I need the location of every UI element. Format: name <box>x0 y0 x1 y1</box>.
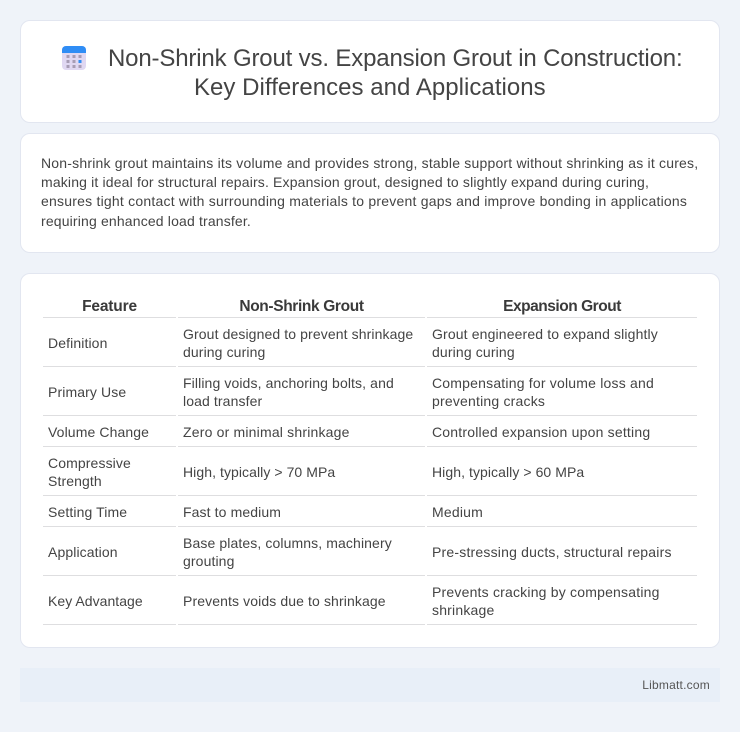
row: Definition <box>48 326 658 360</box>
row: Setting Time: Setting Time <box>48 504 127 520</box>
row: Application: grouting <box>183 553 234 569</box>
footer bar <box>20 668 720 702</box>
row: Volume Change <box>48 424 650 440</box>
row: Definition: Grout engineered to expand slightly <box>432 326 658 342</box>
footer text: Libmatt.com <box>642 678 710 692</box>
panel: title <box>20 20 720 123</box>
row: Application: Base plates, columns, machinery <box>183 535 392 551</box>
row: Setting Time <box>48 504 483 520</box>
row: Definition: Grout designed to prevent shrinkage <box>183 326 413 342</box>
row: Compressive Strength: High, typically > 70 MPa <box>183 464 335 480</box>
header: Expansion Grout: Expansion Grout <box>503 298 621 315</box>
row: Primary Use: Filling voids, anchoring bolts, and <box>183 375 394 391</box>
panel: introduction <box>20 133 720 253</box>
row: Key Advantage: Key Advantage <box>48 593 143 609</box>
heading: title line 2: Key Differences and Applications <box>194 74 546 101</box>
icon: calendar <box>62 46 86 70</box>
header: Non-Shrink Grout: Non-Shrink Grout <box>239 298 364 315</box>
text block: introduction <box>41 154 698 229</box>
row: Definition: Definition <box>48 335 107 351</box>
panel: comparison table <box>20 273 720 648</box>
row: Compressive Strength: Strength <box>48 473 102 489</box>
row: Primary Use: load transfer <box>183 393 262 409</box>
row: Primary Use <box>48 375 654 409</box>
row: Volume Change: Zero or minimal shrinkage <box>183 424 350 440</box>
text block: introduction: requiring enhanced load transfer. <box>41 213 251 229</box>
row: Key Advantage <box>48 584 660 618</box>
row: Compressive Strength: Compressive <box>48 455 131 471</box>
row: Application <box>48 535 672 569</box>
text block: introduction: making it ideal for structural repairs. Expansion grout, designed to slightly expand during curing, <box>41 174 649 190</box>
row: Definition: during curing <box>432 344 515 360</box>
row: Primary Use: Primary Use <box>48 384 126 400</box>
row: Key Advantage: Prevents voids due to shrinkage <box>183 593 386 609</box>
text block: introduction: ensures tight contact with surrounding materials to prevent gaps and improve bonding in applications <box>41 193 687 209</box>
row: Primary Use: preventing cracks <box>432 393 545 409</box>
text block: introduction: Non-shrink grout maintains its volume and provides strong, stable support without shrinking as it cures, <box>41 154 698 170</box>
row: Volume Change: Controlled expansion upon setting <box>432 424 650 440</box>
row: Key Advantage: Prevents cracking by compensating <box>432 584 660 600</box>
row: Compressive Strength: High, typically > 60 MPa <box>432 464 584 480</box>
row: Application: Application <box>48 544 118 560</box>
header: Feature: Feature <box>82 298 137 315</box>
row: Volume Change: Volume Change <box>48 424 149 440</box>
row: Setting Time: Fast to medium <box>183 504 281 520</box>
row: Compressive Strength <box>48 455 584 489</box>
row: Definition: during curing <box>183 344 265 360</box>
row: Key Advantage: shrinkage <box>432 602 495 618</box>
table header <box>82 298 622 315</box>
heading: title line 1: Non-Shrink Grout vs. Expansion Grout in Construction: <box>108 45 682 72</box>
row: Primary Use: Compensating for volume loss and <box>432 375 654 391</box>
row: Application: Pre-stressing ducts, structural repairs <box>432 544 672 560</box>
row: Setting Time: Medium <box>432 504 483 520</box>
